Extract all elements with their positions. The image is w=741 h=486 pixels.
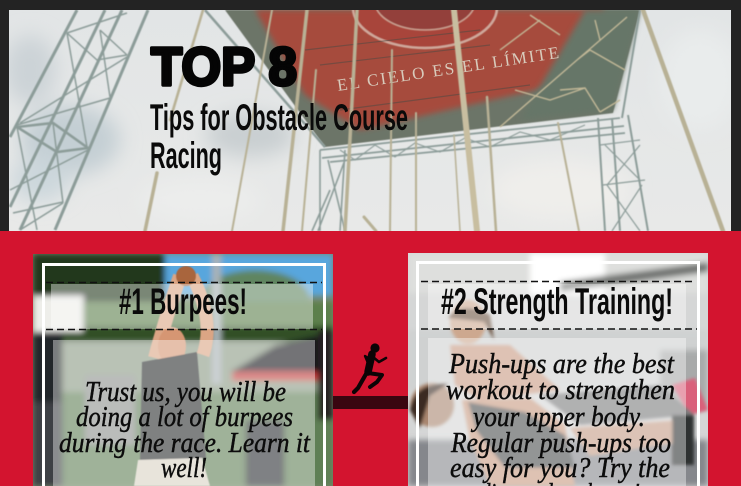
connector bar xyxy=(333,396,408,409)
body text: doing a lot of burpees xyxy=(76,402,293,433)
heading: #1 Burpees! xyxy=(119,281,247,322)
translucent panels xyxy=(51,284,313,329)
header frame xyxy=(0,0,741,231)
body text: Regular push-ups too xyxy=(450,428,671,459)
title: TOP 8: TOP 8 xyxy=(151,37,297,97)
body text: your upper body. xyxy=(470,402,645,433)
hanging ropes xyxy=(145,10,723,231)
diagonal beam to banner xyxy=(205,10,325,147)
right lattice tower xyxy=(598,10,648,231)
panel: #2 Strength Training xyxy=(408,253,708,486)
body text: workout to strengthen xyxy=(446,375,675,406)
clouds xyxy=(9,34,608,206)
subtitle: Racing xyxy=(150,135,222,176)
body text: Trust us, you will be xyxy=(85,377,286,408)
truss and towers xyxy=(10,10,648,231)
panel: #1 Burpees xyxy=(33,254,333,486)
push-up figures xyxy=(410,300,708,486)
dashed rules xyxy=(46,282,322,330)
photo: push-ups in a gym xyxy=(408,253,708,486)
body text: during the race. Learn it xyxy=(59,428,311,459)
body text: well! xyxy=(161,453,207,484)
body text: easy for you? Try the xyxy=(450,453,670,484)
left lattice tower xyxy=(10,10,148,230)
athlete figure xyxy=(134,266,210,486)
photo: athlete doing burpees xyxy=(33,254,333,486)
banner slogan: EL CIELO ES EL LÍMITE xyxy=(336,43,560,95)
translucent panels xyxy=(428,284,686,329)
under-banner truss xyxy=(320,118,625,162)
header photo: obstacle tower xyxy=(4,0,740,231)
body text xyxy=(446,349,675,486)
dashed rules xyxy=(421,282,697,329)
banner xyxy=(225,0,640,147)
white frame xyxy=(418,262,698,486)
icon: runner xyxy=(354,343,386,392)
white frame xyxy=(44,264,324,486)
body text: Push-ups are the best xyxy=(448,349,675,380)
subtitle: Tips for Obstacle Course xyxy=(150,97,408,138)
body text xyxy=(59,377,311,484)
subtitle xyxy=(150,97,408,176)
